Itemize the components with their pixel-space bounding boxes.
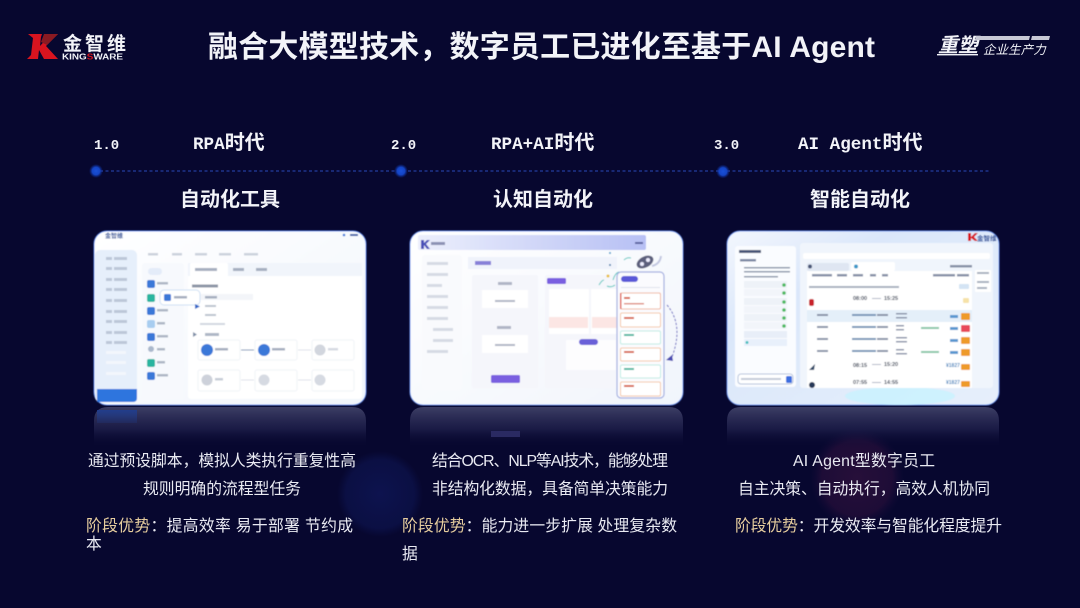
text block: RPA+AI description: 非结构化数据，具备简单决策能力 xyxy=(432,480,668,498)
panel: AI Agent screenshot: ¥1827 xyxy=(946,380,960,386)
main panel xyxy=(188,263,362,399)
results window xyxy=(800,243,993,388)
marker 2.0 xyxy=(394,164,408,178)
title: 融合大模型技术，数字员工已进化至基于AI Agent xyxy=(208,31,875,64)
timeline xyxy=(89,164,990,178)
subheading 2: 认知自动化 xyxy=(493,188,593,211)
subheading 3: 智能自动化 xyxy=(810,188,910,211)
panel: AI Agent screenshot: 15:20 xyxy=(884,362,898,368)
panel: AI Agent screenshot: 15:25 xyxy=(884,296,898,302)
era 3 label: 3.0 xyxy=(714,138,739,154)
era 3 label: AI Agent时代 xyxy=(798,126,922,155)
era 2 label: RPA+AI时代 xyxy=(491,126,594,155)
text block: AI Agent description xyxy=(738,452,990,498)
era 1 label: 1.0 xyxy=(94,138,119,154)
era 1 label xyxy=(94,126,265,155)
screen logo: 金智维 xyxy=(105,232,123,240)
logo: Kingsware: KING SWARE xyxy=(62,52,124,62)
header bar xyxy=(418,235,646,250)
text block: RPA description xyxy=(88,452,356,498)
reflection 3 xyxy=(727,407,999,447)
panel: RPA screenshot xyxy=(94,231,366,405)
text block: RPA+AI advantages: 阶段优势：能力进一步扩展 处理复杂数 xyxy=(402,517,677,535)
panel: AI Agent screenshot xyxy=(727,231,999,405)
right flow panel xyxy=(545,275,617,388)
logo: reshape enterprise productivity xyxy=(937,35,1050,57)
logo: reshape enterprise productivity: 重塑 xyxy=(938,35,981,57)
sidebar xyxy=(95,250,137,402)
list column xyxy=(142,263,184,400)
marker 1.0 xyxy=(89,164,103,178)
fare rows xyxy=(807,310,972,322)
flight row 2 xyxy=(809,364,815,370)
flow cards xyxy=(198,340,240,360)
text block: RPA+AI description xyxy=(432,452,668,498)
marker 3.0 xyxy=(716,164,730,178)
panel: AI Agent screenshot: ¥1827 xyxy=(946,363,960,369)
left form panel xyxy=(472,275,538,388)
logo: reshape enterprise productivity: 企业生产力 xyxy=(983,43,1047,57)
chat panel xyxy=(735,246,796,387)
subheading 1: 自动化工具 xyxy=(180,188,280,211)
text block: RPA+AI advantages xyxy=(402,517,677,563)
panel: RPA+AI screenshot xyxy=(410,231,683,405)
panel: AI Agent screenshot: 08:00 xyxy=(853,296,867,302)
panel: AI Agent screenshot: 14:55 xyxy=(884,380,898,386)
text block: RPA advantages: 阶段优势：提高效率 易于部署 节约成 xyxy=(86,517,353,535)
era 3 label xyxy=(714,126,922,155)
dragged popup xyxy=(160,290,200,305)
reflection 2 xyxy=(410,407,683,447)
panel: AI Agent screenshot: 金智维 xyxy=(977,234,997,242)
era 2 label: 2.0 xyxy=(391,138,416,154)
logo in screen xyxy=(968,233,978,241)
logo: Kingsware xyxy=(27,32,129,62)
title bar xyxy=(468,257,617,269)
text block: AI Agent description: 自主决策、自动执行，高效人机协同 xyxy=(738,480,990,498)
chat input xyxy=(738,374,793,384)
flights table xyxy=(807,271,972,388)
text block: AI Agent description: AI Agent型数字员工 xyxy=(793,452,935,470)
panel: AI Agent screenshot: 08:15 xyxy=(853,363,867,369)
dashed arc xyxy=(667,305,677,357)
sidebar xyxy=(422,255,462,390)
logo: Kingsware: 金智维 xyxy=(63,32,129,55)
robot xyxy=(599,252,661,287)
side widget xyxy=(975,270,991,292)
era 2 label xyxy=(391,126,594,155)
panel: AI Agent screenshot: 07:55 xyxy=(853,380,867,386)
text block: RPA advantages xyxy=(86,517,353,553)
text block: RPA+AI advantages: 据 xyxy=(402,545,418,563)
flight row 3 xyxy=(809,382,815,388)
text block: AI Agent advantages: 阶段优势：开发效率与智能化程度提升 xyxy=(735,517,1002,535)
text block: RPA advantages: 本 xyxy=(86,535,102,553)
flight row 1 xyxy=(809,299,814,306)
era 1 label: RPA时代 xyxy=(193,126,265,155)
text block: RPA description: 规则明确的流程型任务 xyxy=(143,480,301,498)
reflection 1 xyxy=(94,407,366,447)
result list panel xyxy=(617,272,664,398)
top nav xyxy=(148,253,158,256)
text block: RPA+AI description: 结合OCR、NLP等AI技术，能够处理 xyxy=(432,452,668,470)
text block: RPA description: 通过预设脚本，模拟人类执行重复性高 xyxy=(88,452,356,470)
